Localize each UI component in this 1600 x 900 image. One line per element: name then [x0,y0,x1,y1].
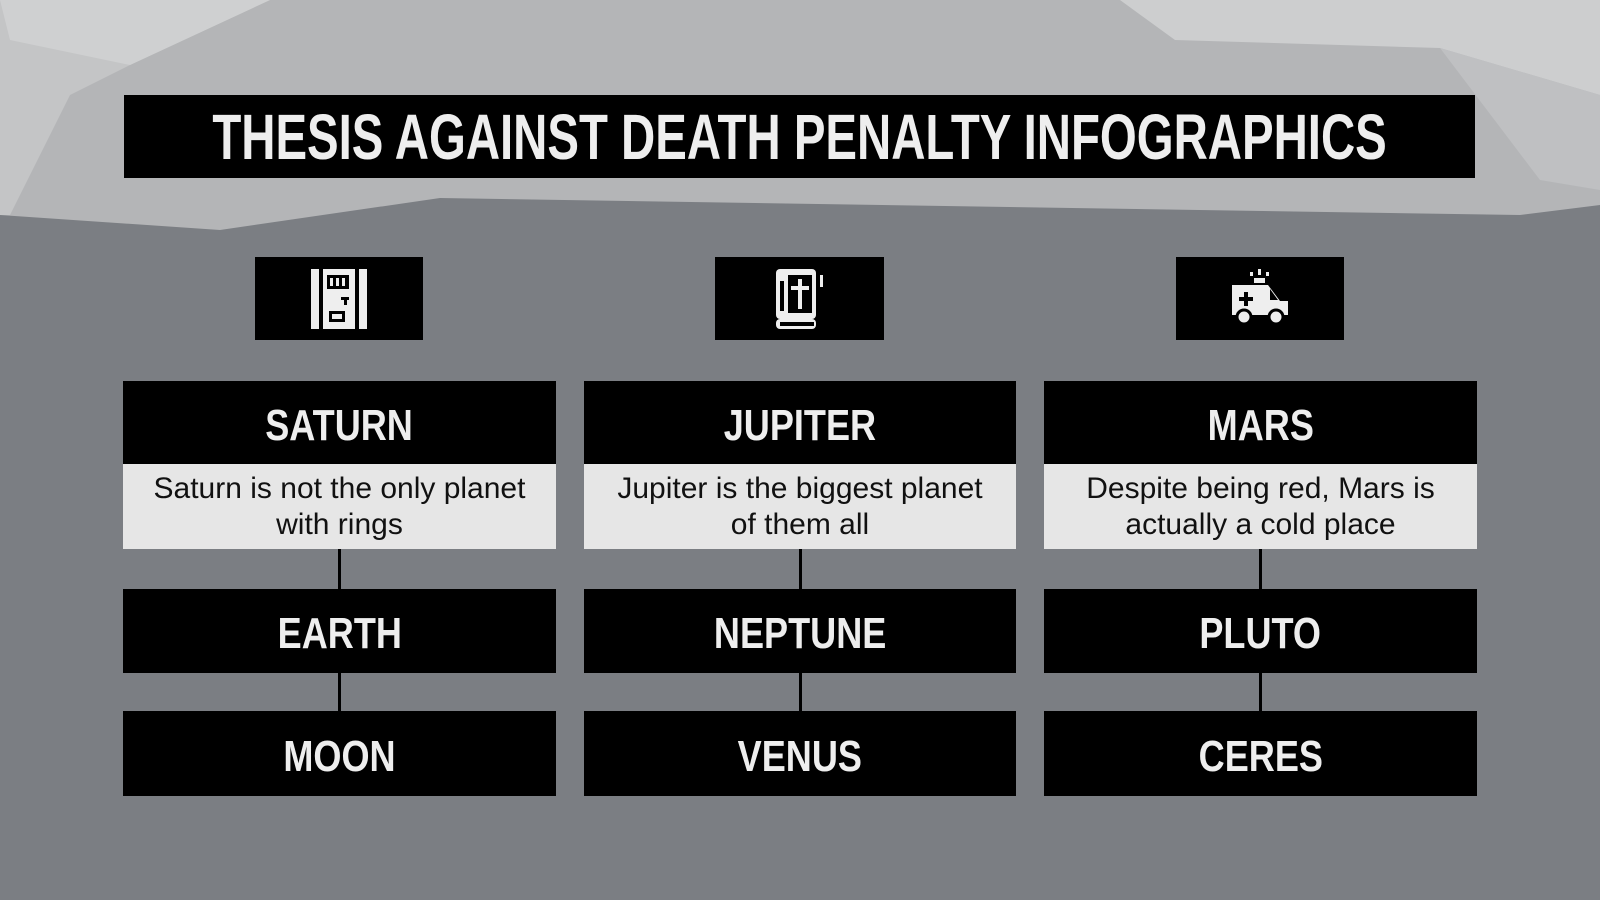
description: mars [1044,464,1477,549]
description: mars: actually a cold place [1125,508,1396,540]
column: mars [1044,381,1477,796]
box: earth [123,589,556,673]
column: jupiter [584,381,1016,796]
box: venus [584,711,1016,796]
header: mars [1044,381,1477,464]
connector lines [1259,541,1262,761]
icon: bible [715,257,884,340]
header: saturn: SATURN [266,400,413,450]
box: ceres: CERES [1198,732,1323,780]
description: jupiter [584,464,1016,549]
header: jupiter: JUPITER [724,400,876,450]
description: jupiter: Jupiter is the biggest planet [617,472,983,504]
description: jupiter: of them all [731,508,869,540]
box: neptune [584,589,1016,673]
box: pluto: PLUTO [1200,609,1321,658]
header: jupiter [584,381,1016,464]
connector lines [799,541,802,761]
box: moon [123,711,556,796]
box: neptune: NEPTUNE [714,609,886,658]
box: moon: MOON [283,732,396,780]
box: venus: VENUS [738,732,862,780]
box: ceres [1044,711,1477,796]
title: THESIS AGAINST DEATH PENALTY INFOGRAPHICS [212,100,1387,172]
description: saturn: with rings [276,508,403,540]
description: saturn: Saturn is not the only planet [154,472,525,504]
icon: prison door [255,257,423,340]
box: pluto [1044,589,1477,673]
icon: ambulance [1176,257,1344,340]
header: saturn [123,381,556,464]
column: saturn [123,381,556,796]
header: mars: MARS [1207,400,1314,450]
description: mars: Despite being red, Mars is [1086,472,1435,504]
description: saturn [123,464,556,549]
connector lines [338,541,341,761]
box: earth: EARTH [277,609,402,658]
